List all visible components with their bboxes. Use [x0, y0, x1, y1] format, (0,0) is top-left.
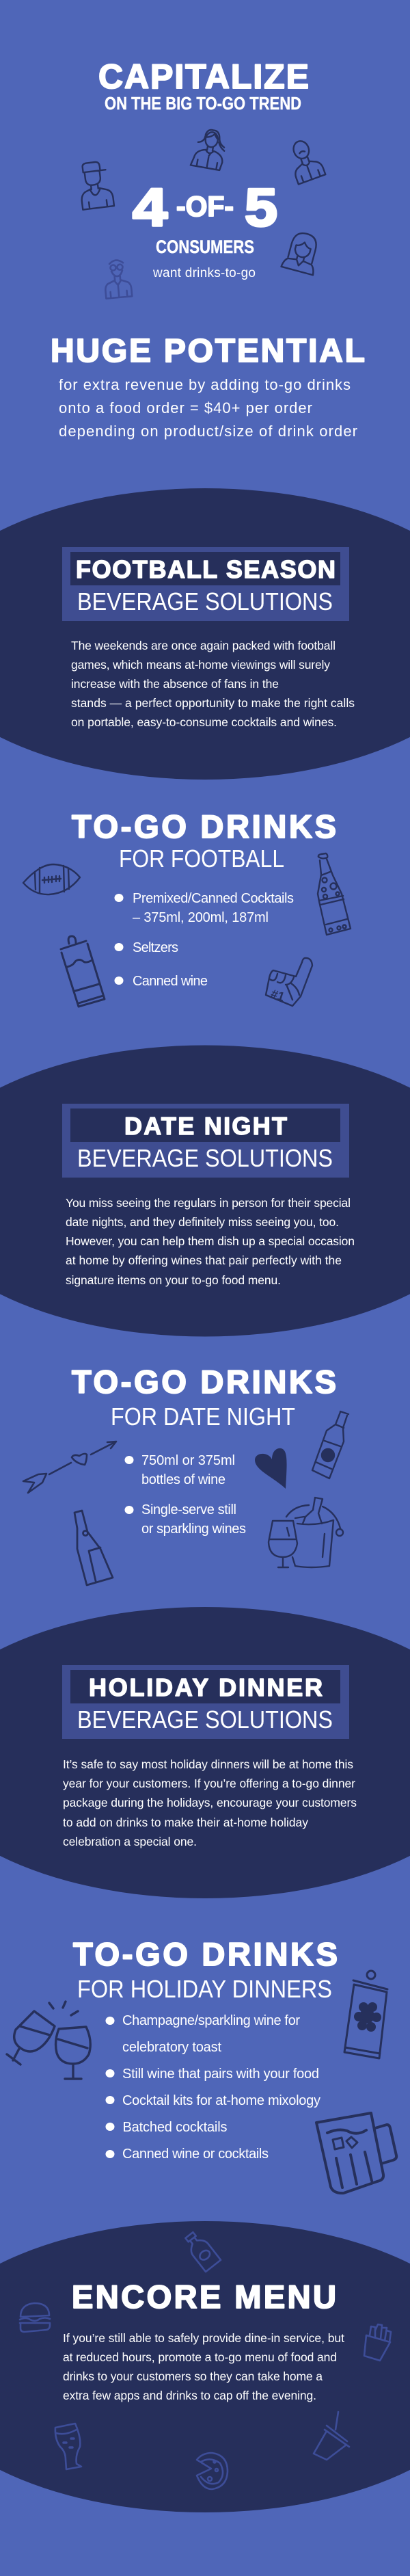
text block: potential — [59, 376, 357, 440]
list: football drinks: Seltzers — [133, 940, 178, 955]
heading box: holiday dinner: HOLIDAY DINNER — [89, 1673, 323, 1701]
heading: to-go drinks for holiday dinners: FOR HOLIDAY DINNERS — [77, 1975, 332, 2003]
text block: holiday dinner: It’s safe to say most holiday dinners will be at home this — [63, 1757, 353, 1771]
list: holiday drinks: celebratory toast — [122, 2040, 221, 2055]
icon: sauce bottle — [182, 2229, 221, 2272]
heading: huge potential: HUGE POTENTIAL — [51, 333, 365, 369]
heading: to-go drinks for date night: FOR DATE NIGHT — [111, 1403, 295, 1431]
icon: pizza — [197, 2453, 228, 2489]
text block: date night: However, you can help them dish up a special occasion — [66, 1234, 355, 1248]
text block: date night: at home by offering wines that pair perfectly with the — [66, 1253, 342, 1267]
icon: soda bottle — [318, 853, 351, 935]
text block: date night: date nights, and they definitely miss seeing you, too. — [66, 1215, 339, 1229]
list: football drinks: Canned wine — [133, 974, 208, 989]
label: want drinks-to-go: want drinks-to-go — [152, 266, 256, 280]
icon: foam finger: #1 — [269, 987, 286, 1004]
icon: to-go cup — [314, 2412, 349, 2460]
list: holiday drinks: Cocktail kits for at-home mixology — [122, 2093, 320, 2108]
list: date night drinks: 750ml or 375ml — [141, 1453, 235, 1468]
text block: potential: onto a food order = $40+ per order — [59, 399, 312, 416]
icon: person with glasses (faded) — [103, 259, 132, 299]
text block: encore menu: drinks to your customers so they can take home a — [63, 2369, 323, 2383]
heading: to-go drinks for football: TO-GO DRINKS — [72, 808, 336, 845]
list: date night drinks: Single-serve still — [141, 1502, 236, 1517]
text block: encore menu — [63, 2331, 344, 2402]
subtitle: ON THE BIG TO-GO TREND — [105, 93, 301, 114]
text block: football: increase with the absence of fans in the — [71, 677, 279, 691]
heading box: football season: FOOTBALL SEASON — [76, 555, 336, 583]
icon: mug with ice — [316, 2113, 396, 2193]
icon: can — [61, 936, 105, 1007]
list: holiday drinks: Batched cocktails — [123, 2120, 227, 2135]
icon: person with cap — [77, 161, 114, 210]
heading: to-go drinks for holiday dinners — [73, 1936, 338, 2003]
list: date night drinks: or sparkling wines — [141, 1522, 246, 1537]
text block: football: stands — a perfect opportunity to make the right calls — [71, 696, 355, 710]
list: holiday drinks: Canned wine or cocktails — [122, 2147, 269, 2162]
list: holiday drinks: Still wine that pairs with your food — [122, 2067, 319, 2082]
text block: date night: signature items on your to-go food menu. — [66, 1273, 281, 1287]
text block: encore menu: extra few apps and drinks to cap off the evening. — [63, 2389, 316, 2402]
icon: can with flower — [344, 1971, 387, 2058]
list: holiday drinks — [105, 2013, 320, 2162]
heading box: date night — [62, 1104, 349, 1178]
text block: potential: for extra revenue by adding to-go drinks — [59, 376, 351, 393]
icon: fries — [364, 2324, 391, 2361]
text block: football — [71, 639, 355, 729]
icon: burger — [20, 2303, 50, 2332]
icon: bald person with moustache — [285, 137, 325, 184]
list: date night drinks: bottles of wine — [141, 1472, 226, 1487]
icon: wine bottle with flower — [312, 1411, 348, 1478]
icon: woman with long hair — [282, 230, 323, 275]
text block: holiday dinner: celebration a special one. — [63, 1835, 197, 1848]
heading box: football season: BEVERAGE SOLUTIONS — [77, 587, 333, 615]
heading: to-go drinks for holiday dinners: TO-GO DRINKS — [73, 1936, 338, 1972]
heading: to-go drinks for football — [72, 808, 336, 873]
heading box: date night: DATE NIGHT — [124, 1112, 287, 1140]
heading: to-go drinks for football: FOR FOOTBALL — [119, 845, 284, 873]
text block: date night: You miss seeing the regulars in person for their special — [66, 1196, 351, 1210]
statistic: 4 of 5: 4 — [133, 177, 167, 237]
icon: wine bottle with label — [74, 1511, 113, 1585]
list: football drinks: Premixed/Canned Cocktails — [133, 891, 294, 906]
title: capitalize: CAPITALIZE — [98, 57, 309, 96]
heading: to-go drinks for date night — [72, 1364, 336, 1431]
icon: arrow with heart — [23, 1442, 116, 1493]
text block: football: games, which means at-home viewings will surely — [71, 658, 330, 672]
text block: holiday dinner — [63, 1757, 357, 1848]
icon: person with long hair — [191, 127, 228, 170]
heading box: holiday dinner — [62, 1665, 349, 1739]
statistic: 4 of 5: 5 — [245, 177, 277, 237]
icon: foam finger — [266, 958, 312, 1006]
icon: toasting wine glasses — [7, 2002, 90, 2079]
text block: encore menu: If you’re still able to safely provide dine-in service, but — [63, 2331, 344, 2345]
heading box: date night: BEVERAGE SOLUTIONS — [77, 1144, 333, 1172]
heading box: football season — [62, 547, 349, 621]
text block: football: The weekends are once again packed with football — [71, 639, 336, 652]
icon: ice bucket and wine glass — [269, 1498, 343, 1567]
panel: date night ellipse — [0, 1045, 410, 1336]
text block: potential: depending on product/size of drink order — [59, 423, 357, 440]
text block: date night — [66, 1196, 355, 1287]
list: holiday drinks: Champagne/sparkling wine for — [122, 2013, 300, 2028]
panel: football season ellipse — [0, 488, 410, 780]
heading: encore menu: ENCORE MENU — [72, 2279, 336, 2315]
heading: to-go drinks for date night: TO-GO DRINKS — [72, 1364, 336, 1400]
statistic: 4 of 5: -OF- — [176, 190, 234, 222]
text block: holiday dinner: year for your customers. If you’re offering a to-go dinner — [63, 1777, 355, 1790]
text block: holiday dinner: package during the holidays, encourage your customers — [63, 1796, 357, 1809]
panel: holiday dinner ellipse — [0, 1607, 410, 1898]
panel: encore menu ellipse — [0, 2221, 410, 2512]
text block: football: on portable, easy-to-consume cocktails and wines. — [71, 715, 337, 729]
text block: encore menu: at reduced hours, promote a to-go menu of food and — [63, 2350, 337, 2364]
list: date night drinks — [124, 1453, 246, 1537]
list: football drinks — [115, 891, 294, 989]
icon: football — [23, 864, 80, 894]
heading box: holiday dinner: BEVERAGE SOLUTIONS — [77, 1705, 333, 1734]
icon: heart — [255, 1448, 287, 1489]
list: football drinks: – 375ml, 200ml, 187ml — [133, 910, 269, 925]
label: consumers: CONSUMERS — [156, 237, 254, 257]
statistic: 4 of 5 — [133, 177, 277, 237]
icon: beer glass — [55, 2424, 81, 2469]
text block: holiday dinner: to add on drinks to make their at-home holiday — [63, 1816, 308, 1829]
